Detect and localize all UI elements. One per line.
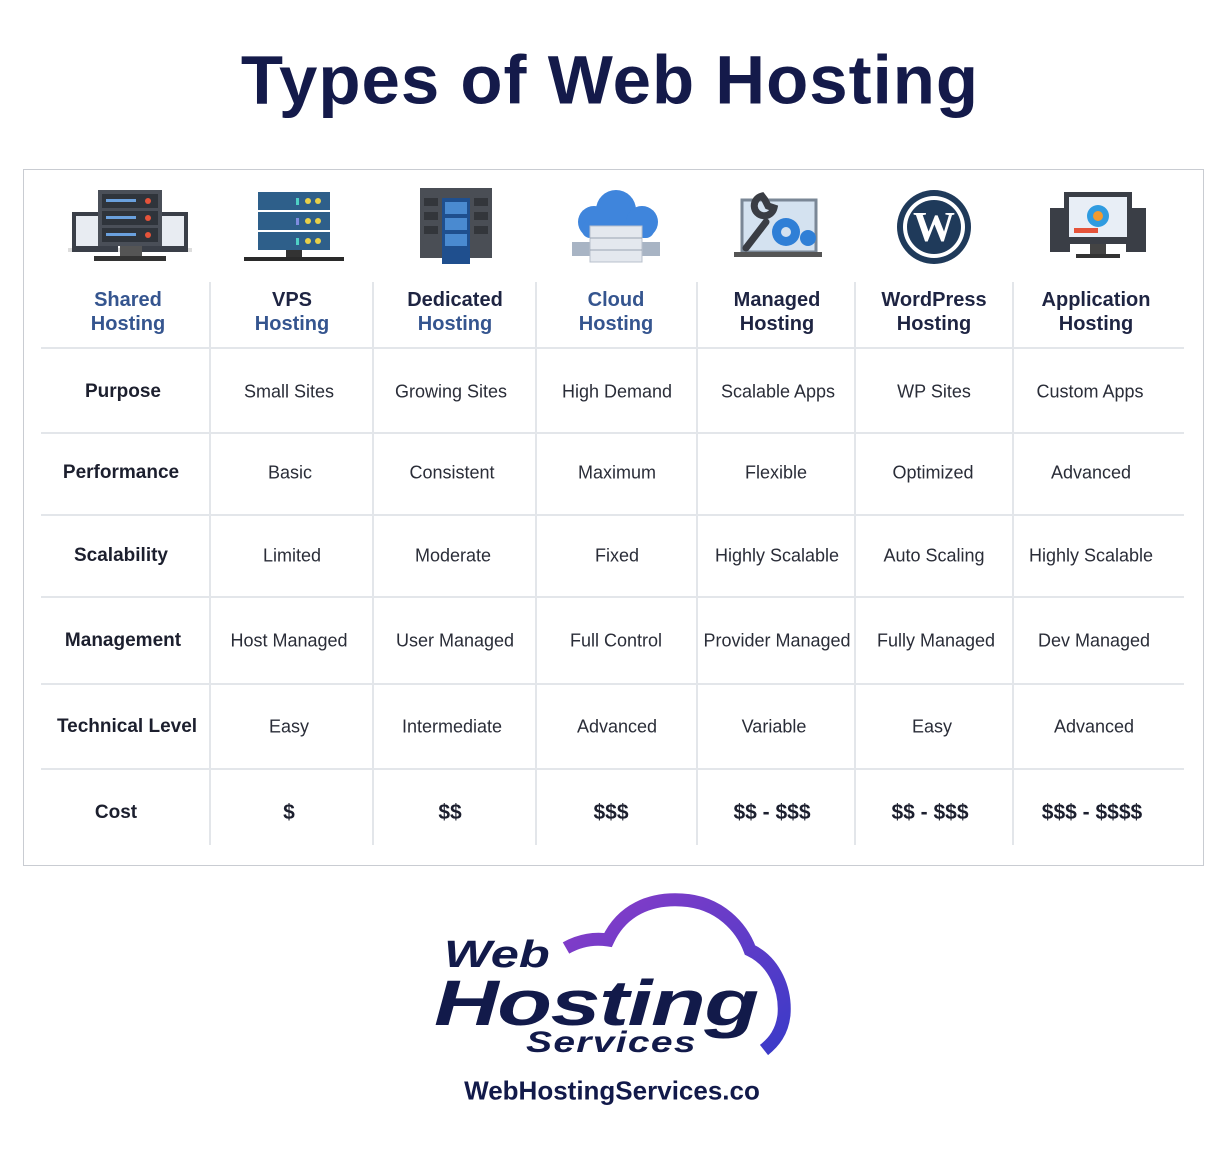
header: dedicated: Hosting [418, 313, 492, 335]
header: managed: Managed [734, 289, 820, 311]
icon: shared hosting [68, 190, 192, 261]
row: scalability [74, 545, 1153, 566]
row: performance: Maximum [578, 462, 656, 482]
row: performance [63, 462, 1131, 483]
website url: WebHostingServices.co [464, 1076, 760, 1106]
icon: cloud [572, 190, 660, 262]
icon: dedicated [420, 188, 492, 264]
row: performance: Flexible [745, 462, 807, 482]
row: management: Full Control [570, 630, 662, 650]
header: cloud: Hosting [579, 313, 653, 335]
row: technical level: Advanced [1054, 716, 1134, 736]
logo: Services: Services [526, 1026, 697, 1059]
row: management: Dev Managed [1038, 630, 1150, 650]
row: scalability: Highly Scalable [1029, 546, 1153, 566]
header: application [1042, 289, 1150, 335]
title: Types of Web Hosting [241, 42, 979, 118]
row: technical level: Variable [742, 716, 806, 736]
header: vps: VPS [272, 289, 312, 311]
row: performance: Consistent [409, 462, 495, 482]
row: cost: $$ - $$$ [891, 801, 969, 824]
header: wordpress: Hosting [897, 313, 971, 335]
icon: wordpress: W [913, 205, 955, 251]
panel: comparison table [23, 169, 1204, 866]
header: application: Hosting [1059, 313, 1133, 335]
row: performance: Performance [63, 462, 179, 483]
row: management: User Managed [396, 630, 514, 650]
logo: Web: Web [444, 934, 550, 976]
row: cost [95, 801, 1142, 824]
icon: application [1050, 192, 1146, 258]
row: cost: $$$ [593, 801, 629, 824]
icon: managed [734, 192, 822, 257]
row: scalability: Auto Scaling [883, 546, 985, 566]
header: shared: Hosting [91, 313, 165, 335]
header: shared [91, 289, 165, 335]
row: purpose [85, 381, 1144, 402]
row: scalability: Limited [263, 546, 321, 566]
row: management: Fully Managed [877, 630, 995, 650]
row: technical level [57, 716, 1134, 737]
header: managed [734, 289, 820, 335]
row: purpose: Small Sites [244, 382, 334, 402]
logo [434, 893, 791, 1059]
row: purpose: Growing Sites [395, 382, 507, 402]
header: cloud: Cloud [588, 289, 644, 311]
row: purpose: High Demand [562, 382, 672, 402]
row: technical level: Technical Level [57, 716, 197, 737]
header: vps: Hosting [255, 313, 329, 335]
row: scalability: Highly Scalable [715, 546, 839, 566]
row: purpose: WP Sites [897, 382, 971, 402]
header: shared: Shared [94, 289, 162, 311]
header: vps [255, 289, 329, 335]
row: cost: $ [283, 801, 295, 824]
row: management: Management [65, 630, 181, 651]
header: application: Application [1042, 289, 1150, 311]
row: cost: $$$ - $$$$ [1042, 801, 1142, 824]
row: performance: Advanced [1051, 462, 1131, 482]
header: wordpress [881, 289, 987, 335]
row: purpose: Purpose [85, 381, 161, 402]
row: scalability: Scalability [74, 545, 168, 566]
row: performance: Basic [268, 462, 312, 482]
header: dedicated: Dedicated [407, 289, 503, 311]
row: management [65, 630, 1150, 651]
row: management: Host Managed [230, 630, 348, 650]
row: management: Provider Managed [703, 630, 851, 650]
row: cost: Cost [95, 802, 137, 823]
row: technical level: Easy [912, 716, 952, 736]
header: wordpress: WordPress [881, 289, 987, 311]
row: purpose: Scalable Apps [721, 382, 835, 402]
logo: cloud arc [562, 893, 791, 1056]
row: technical level: Advanced [577, 716, 657, 736]
row: technical level: Easy [269, 716, 309, 736]
header: dedicated [407, 289, 503, 335]
header: cloud [579, 289, 653, 335]
header: managed: Hosting [740, 313, 814, 335]
row: technical level: Intermediate [402, 716, 502, 736]
row: purpose: Custom Apps [1036, 382, 1144, 402]
row: scalability: Moderate [415, 546, 491, 566]
row: cost: $$ - $$$ [733, 801, 811, 824]
row: cost: $$ [438, 801, 462, 824]
row: performance: Optimized [892, 462, 974, 482]
icon: wordpress [897, 190, 971, 264]
logo: Hosting: Hosting [434, 967, 758, 1039]
row: scalability: Fixed [595, 546, 639, 566]
icon: vps [244, 192, 344, 261]
